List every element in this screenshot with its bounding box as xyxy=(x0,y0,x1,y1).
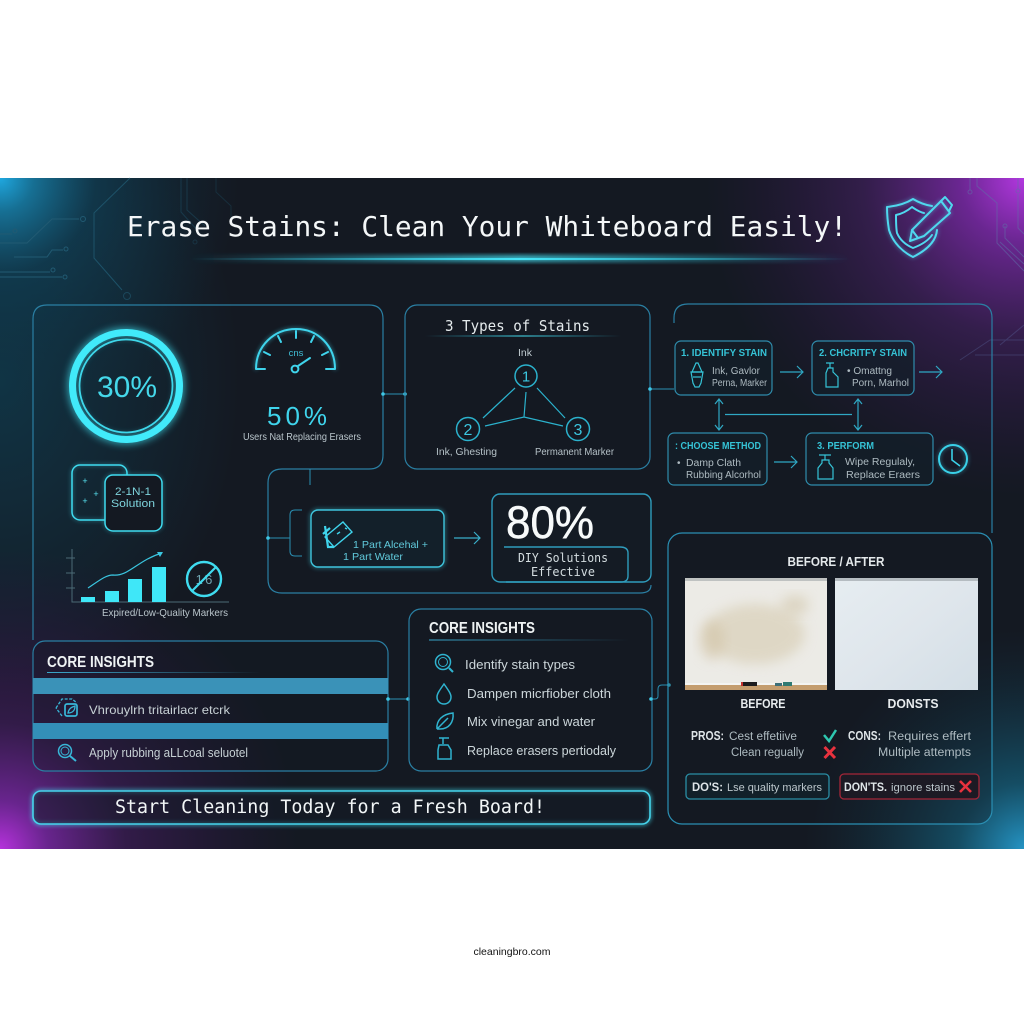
circuit decoration: top left xyxy=(0,178,231,300)
card: alcohol and water mix: 1 Part Water xyxy=(343,551,404,563)
panel: core insights centre: Dampen micrfiober cloth xyxy=(467,687,611,701)
panel: before and after xyxy=(668,533,992,824)
title underline xyxy=(190,255,850,262)
dark poster background xyxy=(0,178,1024,849)
icon: no expired markers xyxy=(187,562,221,596)
circuit decoration: top right xyxy=(960,178,1024,360)
step 4 card: Wipe Regulaly, xyxy=(845,457,915,468)
step 3 card: Rubbing Alcorhol xyxy=(686,470,761,481)
cons: Multiple attempts xyxy=(878,747,971,759)
card: 80% DIY solutions effective: 80% xyxy=(506,497,594,548)
card: don'ts: DON'TS. xyxy=(844,780,887,794)
icon: spray bottle xyxy=(438,738,451,759)
card: do's xyxy=(686,774,829,799)
title: Erase Stains: Clean Your Whiteboard Easily! xyxy=(127,210,847,243)
card: alcohol and water mix: 1 Part Alcehal + xyxy=(353,539,428,551)
photo: clean whiteboard xyxy=(835,578,978,690)
icon: no expired markers: 1⁄6 xyxy=(196,572,212,587)
step 1 card: Perna, Marker xyxy=(712,378,768,389)
step 4 card: Replace Eraers xyxy=(846,470,920,481)
panel: core insights centre: Mix vinegar and water xyxy=(467,715,595,729)
label: expired markers: Expired/Low-Quality Markers xyxy=(102,607,228,619)
step 1 card: Ink, Gavlor xyxy=(712,366,761,377)
stain diagram: 3 xyxy=(574,422,583,439)
panel: 3 types of stains xyxy=(405,305,650,469)
card: 2-in-1 solution xyxy=(72,465,162,531)
cons: CONS: xyxy=(848,729,881,743)
arrow: step 3 to perform xyxy=(774,456,797,468)
icon: check mark xyxy=(824,730,836,741)
card: don'ts xyxy=(840,774,979,799)
chart: rising bars with trend line xyxy=(66,549,229,602)
arrows between upper and lower steps xyxy=(715,399,862,430)
panel: core insights left: Apply rubbing aLLcoal seluotel xyxy=(89,746,248,760)
panel: 3 types of stains: Ink xyxy=(518,347,533,359)
arrow: step 2 onward xyxy=(919,366,942,378)
step 3 card: : CHOOSE METHOD xyxy=(675,440,761,452)
stain diagram xyxy=(456,365,590,440)
icon: shield with pencil xyxy=(887,197,952,257)
step 3 card: • xyxy=(677,458,681,469)
step 3 card: Damp Clath xyxy=(686,458,741,469)
card: 2-in-1 solution: Solution xyxy=(111,498,155,510)
card: do's: Lse quality markers xyxy=(727,782,822,794)
stat: 30% ring xyxy=(72,332,180,440)
card: alcohol and water mix xyxy=(311,510,444,567)
panel: before and after: DONSTS xyxy=(888,696,939,711)
panel: core insights centre: Replace erasers pertiodaly xyxy=(467,744,617,758)
icon: magnifier xyxy=(58,744,76,761)
panel: core insights centre: CORE INSIGHTS xyxy=(429,620,535,637)
card: do's: DO'S: xyxy=(692,780,723,794)
panel: core insights centre xyxy=(409,609,652,771)
step 4 card: 3. PERFORM xyxy=(817,440,874,452)
label: users not replacing erasers: Users Nat Replacing Erasers xyxy=(243,431,361,443)
pros xyxy=(691,729,804,759)
stat: 30% ring: 30% xyxy=(97,371,157,404)
source credit: cleaningbro.com xyxy=(473,946,551,958)
stat: gauge icon: cns xyxy=(289,348,304,359)
card: 2-in-1 solution: + xyxy=(93,489,99,499)
cons xyxy=(848,729,972,759)
icon: water drop xyxy=(437,684,451,704)
panel: before and after: BEFORE xyxy=(740,696,786,711)
cons: Requires effert xyxy=(888,731,972,743)
card: 2-in-1 solution: 2-1N-1 xyxy=(115,486,151,498)
card: 2-in-1 solution: + xyxy=(82,476,88,486)
panel: before and after: BEFORE / AFTER xyxy=(788,554,885,569)
pros: Clean regually xyxy=(731,747,804,759)
stain diagram: 2 xyxy=(464,422,473,439)
step 1 card: 1. IDENTIFY STAIN xyxy=(681,347,767,359)
panel: 3 types of stains: Ink, Ghesting xyxy=(436,446,497,458)
card: 80% DIY solutions effective: Effective xyxy=(531,564,595,579)
connector: stats to stain types xyxy=(381,392,407,396)
pros: PROS: xyxy=(691,729,724,743)
card: don'ts: ignore stains xyxy=(891,782,956,794)
card: 2-in-1 solution: + xyxy=(82,496,88,506)
arrow: mix to result xyxy=(454,532,480,544)
stat: gauge icon xyxy=(256,329,335,372)
panel: core insights left xyxy=(33,641,388,771)
call to action banner: Start Cleaning Today for a Fresh Board! xyxy=(115,797,545,818)
connector: core insights left to centre xyxy=(386,697,410,701)
stat: 50%: 50% xyxy=(267,401,327,431)
step 1 card xyxy=(675,341,772,395)
step 3 card xyxy=(668,433,767,485)
step 2 card: • Omattng xyxy=(847,366,892,377)
pros: Cest effetiive xyxy=(729,731,797,743)
arrow: step 1 to 2 xyxy=(780,366,803,378)
panel: mixture and result xyxy=(266,469,651,582)
card: 80% DIY solutions effective: DIY Solutions xyxy=(518,550,608,565)
icon: cleaning eraser xyxy=(323,522,352,547)
card: 80% DIY solutions effective xyxy=(492,494,651,582)
panel: 3 types of stains: Permanent Marker xyxy=(535,446,614,458)
icon: leaf xyxy=(437,713,453,729)
panel: statistics outline xyxy=(33,305,651,640)
connector: stain types to process xyxy=(648,387,674,391)
icon: leaf badge xyxy=(56,699,77,716)
step 2 card xyxy=(812,341,914,395)
panel: core insights left: CORE INSIGHTS xyxy=(47,654,154,671)
stain diagram: 1 xyxy=(522,368,530,386)
step 4 card xyxy=(806,433,933,485)
panel: core insights centre: Identify stain types xyxy=(465,658,575,672)
icon: clock xyxy=(939,445,967,473)
icon: cross mark xyxy=(824,747,835,758)
panel: core insights left: Vhrouylrh tritairlacr etcrk xyxy=(89,703,231,717)
step 2 card: Porn, Marhol xyxy=(852,378,909,389)
photo: stained whiteboard xyxy=(685,578,827,690)
icon: magnifier xyxy=(436,654,453,672)
panel: 3 types of stains: 3 Types of Stains xyxy=(445,317,590,335)
connector: centre insights to before/after xyxy=(649,683,671,701)
panel: process flow xyxy=(668,304,992,533)
infographic xyxy=(0,178,1024,957)
call to action banner xyxy=(33,791,650,824)
step 2 card: 2. CHCRITFY STAIN xyxy=(819,347,907,359)
